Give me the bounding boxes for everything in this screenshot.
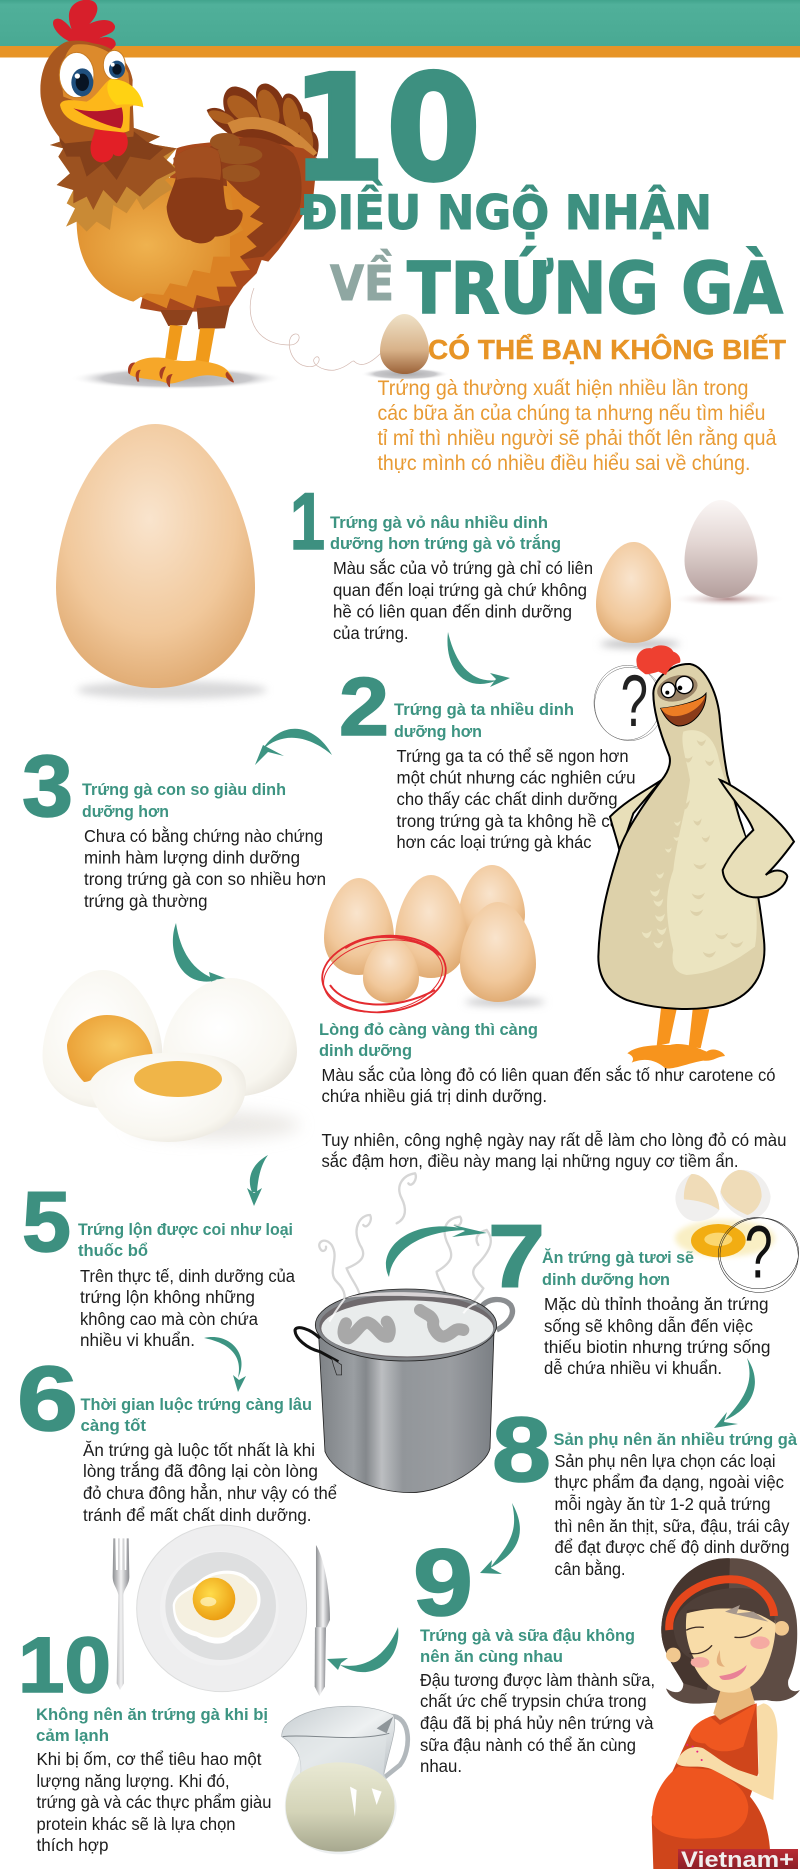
- intro text: [378, 376, 777, 475]
- section 2: Trứng ga ta có thể sẽ ngon hơn: [396, 746, 628, 766]
- section 8: [492, 1399, 798, 1579]
- section 2: [339, 660, 636, 852]
- section 9: Trứng gà và sữa đậu không: [420, 1626, 635, 1645]
- section 1: dưỡng hơn trứng gà vỏ trắng: [330, 534, 561, 553]
- section 7: [488, 1206, 770, 1378]
- rooster comb: [53, 0, 116, 57]
- section 1: của trứng.: [333, 623, 408, 643]
- hair: [661, 1558, 800, 1704]
- icon: pregnant woman: [652, 1558, 800, 1869]
- section 6: 6: [17, 1348, 78, 1450]
- rooster thighs: [160, 310, 193, 326]
- section 4: Lòng đỏ càng vàng thì càng: [319, 1020, 538, 1039]
- arrow 9 to 10: [327, 1627, 398, 1672]
- section 10: 10: [18, 1620, 111, 1709]
- icon: brown egg: [596, 542, 680, 648]
- section 4: chứa nhiều giá trị dinh dưỡng.: [322, 1086, 547, 1106]
- icon: chicken with question mark: [594, 645, 794, 1069]
- arrow 2 to 3: [255, 729, 332, 765]
- section 7: dinh dưỡng hơn: [542, 1270, 670, 1289]
- left half egg: [42, 970, 162, 1108]
- fringe: [673, 1588, 775, 1660]
- title: về: VỀ: [330, 249, 394, 312]
- right arm: [720, 780, 794, 897]
- chicken beak: [661, 693, 706, 726]
- thin string to egg: [250, 288, 381, 370]
- icon: broken egg with question mark: [675, 1170, 800, 1298]
- section 6: đỏ chưa đông hẳn, như vậy có thể: [83, 1482, 337, 1503]
- section 6: tránh để mất chất dinh dưỡng.: [83, 1505, 312, 1525]
- subtitle: CÓ THỂ BẠN KHÔNG BIẾT: [428, 333, 786, 365]
- bust: [690, 1703, 757, 1751]
- section 1: quan đến loại trứng gà chứ không: [333, 580, 587, 600]
- chicken comb: [636, 645, 680, 675]
- section 9: sữa đậu nành có thể ăn cùng: [420, 1735, 636, 1755]
- section 1: 1: [290, 477, 325, 567]
- section 8: Sản phụ nên lựa chọn các loại: [554, 1451, 776, 1471]
- arrow 7 to 8: [714, 1358, 755, 1428]
- question bubble: [714, 1212, 800, 1298]
- nose: [717, 1650, 725, 1667]
- icon: rooster: [40, 0, 319, 390]
- rooster upper tail brown: [214, 146, 262, 164]
- front half egg: [89, 1052, 246, 1142]
- arrow to 7: [386, 1225, 487, 1277]
- neck: [713, 1687, 755, 1720]
- feet: [627, 1006, 725, 1069]
- section 6: Thời gian luộc trứng càng lâu: [80, 1395, 312, 1414]
- section 7: 7: [488, 1206, 545, 1306]
- section 4: Tuy nhiên, công nghệ ngày nay rất dễ làm cho lòng đỏ có màu: [322, 1129, 786, 1150]
- face: [686, 1608, 775, 1693]
- section 5: trứng lộn không những: [80, 1287, 255, 1307]
- section 2: dưỡng hơn: [394, 722, 482, 741]
- whole egg: [163, 978, 297, 1097]
- arrow 5 to 6: [204, 1337, 246, 1392]
- rooster neck plumage: [50, 100, 180, 232]
- section 8: cân bằng.: [554, 1558, 626, 1579]
- right handle: [482, 1300, 512, 1330]
- icon: boiled eggs: [42, 970, 300, 1142]
- intro text: thực mình có nhiều điều hiểu sai về chúng.: [378, 451, 750, 475]
- water swirls: [344, 1310, 463, 1338]
- rooster tail feathers: [207, 84, 319, 160]
- knife: [315, 1545, 330, 1696]
- section 10: trứng gà và các thực phẩm giàu: [36, 1792, 272, 1812]
- rooster head: [40, 41, 134, 143]
- section 2: một chút nhưng các nghiên cứu: [396, 768, 636, 788]
- section 8: mỗi ngày ăn từ 1-2 quả trứng: [554, 1493, 770, 1514]
- icon: white egg: [670, 500, 786, 607]
- belly feathers: [667, 730, 757, 975]
- spilled egg white: [675, 1220, 775, 1257]
- section 9: đậu đã bị phá hủy nên trứng và: [420, 1713, 654, 1733]
- section 3: trứng gà thường: [84, 891, 208, 911]
- section 2: trong trứng gà ta không hề cao: [396, 811, 628, 831]
- section 9: nhau.: [420, 1756, 462, 1776]
- rooster wattle: [91, 129, 128, 162]
- egg shells: [675, 1170, 771, 1221]
- section 4: [319, 1020, 786, 1171]
- left handle: [295, 1328, 342, 1375]
- section 5: thuốc bổ: [78, 1241, 148, 1260]
- section 10: lượng năng lượng. Khi đó,: [36, 1771, 230, 1791]
- section 8: 8: [492, 1399, 551, 1501]
- section 10: protein khác sẽ là lựa chọn: [36, 1814, 236, 1834]
- icon: group of eggs: [318, 865, 545, 1021]
- section 3: trong trứng gà con so nhiều hơn: [84, 869, 326, 889]
- question mark: ?: [621, 660, 648, 742]
- dress back: [652, 1703, 770, 1869]
- section 2: Trứng gà ta nhiều dinh: [394, 700, 574, 719]
- section 3: Chưa có bằng chứng nào chứng: [84, 825, 323, 846]
- section 2: cho thấy các chất dinh dưỡng: [396, 789, 618, 809]
- section 1: [290, 477, 593, 643]
- section 7: thiếu biotin nhưng trứng sống: [544, 1337, 770, 1357]
- section 1: hề có liên quan đến dinh dưỡng: [333, 602, 572, 622]
- milk: [286, 1762, 395, 1852]
- body outline: [598, 664, 764, 1009]
- question bubble: [594, 665, 664, 741]
- section 5: 5: [22, 1175, 71, 1270]
- intro text: tỉ mỉ thì nhiều người sẽ phải thốt lên rằng quả: [378, 425, 777, 450]
- closed eyes: [687, 1627, 762, 1654]
- section 9: [413, 1530, 655, 1776]
- ears: [666, 1621, 789, 1662]
- arrow 1 to 2: [447, 632, 510, 687]
- section 10: Khi bị ốm, cơ thể tiêu hao một: [36, 1749, 262, 1769]
- left arm: [610, 780, 662, 853]
- section 5: [22, 1175, 295, 1350]
- rooster orange scallops: [130, 180, 263, 308]
- section 6: lòng trắng đã đông lại còn lòng: [83, 1460, 318, 1481]
- section 7: sống sẽ không dẫn đến việc: [544, 1315, 753, 1336]
- section 4: dinh dưỡng: [319, 1041, 412, 1060]
- rooster rear plumage: [140, 135, 317, 312]
- rooster eyes: [59, 50, 125, 98]
- section 9: 9: [413, 1530, 473, 1636]
- arm and hand: [677, 1703, 777, 1800]
- section 1: Trứng gà vỏ nâu nhiều dinh: [330, 513, 548, 532]
- fried egg: [173, 1571, 261, 1644]
- section 6: [17, 1348, 337, 1525]
- section 2: 2: [339, 660, 389, 753]
- section 9: nên ăn cùng nhau: [420, 1647, 563, 1666]
- section 5: Trứng lộn được coi như loại: [78, 1220, 293, 1239]
- section 10: Không nên ăn trứng gà khi bị: [36, 1705, 268, 1724]
- icon: plate with fried egg, fork and knife: [113, 1525, 408, 1854]
- headband: [669, 1579, 774, 1630]
- header band: [0, 0, 800, 58]
- section 2: hơn các loại trứng gà khác: [396, 832, 592, 852]
- rooster beak: [60, 79, 143, 133]
- section 8: Sản phụ nên ăn nhiều trứng gà: [554, 1430, 798, 1449]
- section 5: không cao mà còn chứa: [80, 1309, 258, 1329]
- section 7: Mặc dù thỉnh thoảng ăn trứng: [544, 1294, 768, 1314]
- chicken eyes: [654, 671, 701, 706]
- icon: red ring: [318, 930, 450, 1021]
- steam: [319, 1173, 491, 1312]
- title: điều ngộ nhận: ĐIỀU NGỘ NHẬN: [300, 180, 712, 241]
- section 9: chất ức chế trypsin chứa trong: [420, 1691, 646, 1711]
- icon: big egg: [56, 424, 267, 699]
- fork: [113, 1538, 129, 1690]
- icon: pot with steam: [295, 1173, 512, 1493]
- intro text: Trứng gà thường xuất hiện nhiều lần trong: [378, 376, 748, 400]
- rooster belly: [77, 177, 243, 302]
- section 8: thì nên ăn thịt, sữa, đậu, trái cây: [554, 1516, 790, 1536]
- belly: [652, 1767, 748, 1839]
- section 10: thích hợp: [36, 1835, 108, 1855]
- section 3: minh hàm lượng dinh dưỡng: [84, 848, 300, 868]
- pot rim: [315, 1289, 497, 1361]
- section 1: Màu sắc của vỏ trứng gà chỉ có liên: [333, 557, 593, 578]
- section 6: càng tốt: [80, 1416, 146, 1435]
- pot body: [319, 1332, 494, 1493]
- yolk: [691, 1224, 746, 1257]
- section 10: cảm lạnh: [36, 1726, 109, 1745]
- section 8: thực phẩm đa dạng, ngoài việc: [554, 1472, 784, 1492]
- section 9: Đậu tương được làm thành sữa,: [420, 1670, 655, 1690]
- section 3: [22, 738, 326, 911]
- intro text: các bữa ăn của chúng ta nhưng nếu tìm hiểu: [378, 401, 766, 425]
- section 7: Ăn trứng gà tươi sẽ: [542, 1248, 694, 1267]
- section 6: Ăn trứng gà luộc tốt nhất là khi: [83, 1440, 315, 1460]
- title: 10: 10: [291, 44, 481, 214]
- lips: [719, 1665, 747, 1680]
- icon: small egg: [361, 314, 449, 380]
- section 4: sắc đậm hơn, điều này mang lại những nguy cơ tiềm ẩn.: [322, 1150, 738, 1171]
- plate: [137, 1525, 307, 1692]
- arrow 8 to 9: [480, 1503, 520, 1574]
- arrow to 5: [247, 1155, 268, 1206]
- section 5: Trên thực tế, dinh dưỡng của: [80, 1266, 295, 1286]
- section 3: Trứng gà con so giàu dinh: [82, 780, 286, 799]
- pitcher of milk: [282, 1706, 408, 1854]
- section 8: để đạt được chế độ dinh dưỡng: [554, 1537, 790, 1557]
- section 10: [18, 1620, 272, 1855]
- section 3: 3: [22, 738, 73, 835]
- section 3: dưỡng hơn: [82, 802, 169, 821]
- rooster wing: [167, 147, 243, 243]
- rooster legs and feet: [165, 325, 183, 360]
- steam rising: [329, 1298, 477, 1322]
- section 5: nhiều vi khuẩn.: [80, 1330, 195, 1350]
- cheeks: [691, 1636, 770, 1668]
- arrow 3 to 4: [173, 923, 230, 986]
- question mark: ?: [745, 1209, 773, 1293]
- section 7: dễ chứa nhiều vi khuẩn.: [544, 1357, 722, 1378]
- section 4: Màu sắc của lòng đỏ có liên quan đến sắc tố như carotene có: [322, 1064, 776, 1085]
